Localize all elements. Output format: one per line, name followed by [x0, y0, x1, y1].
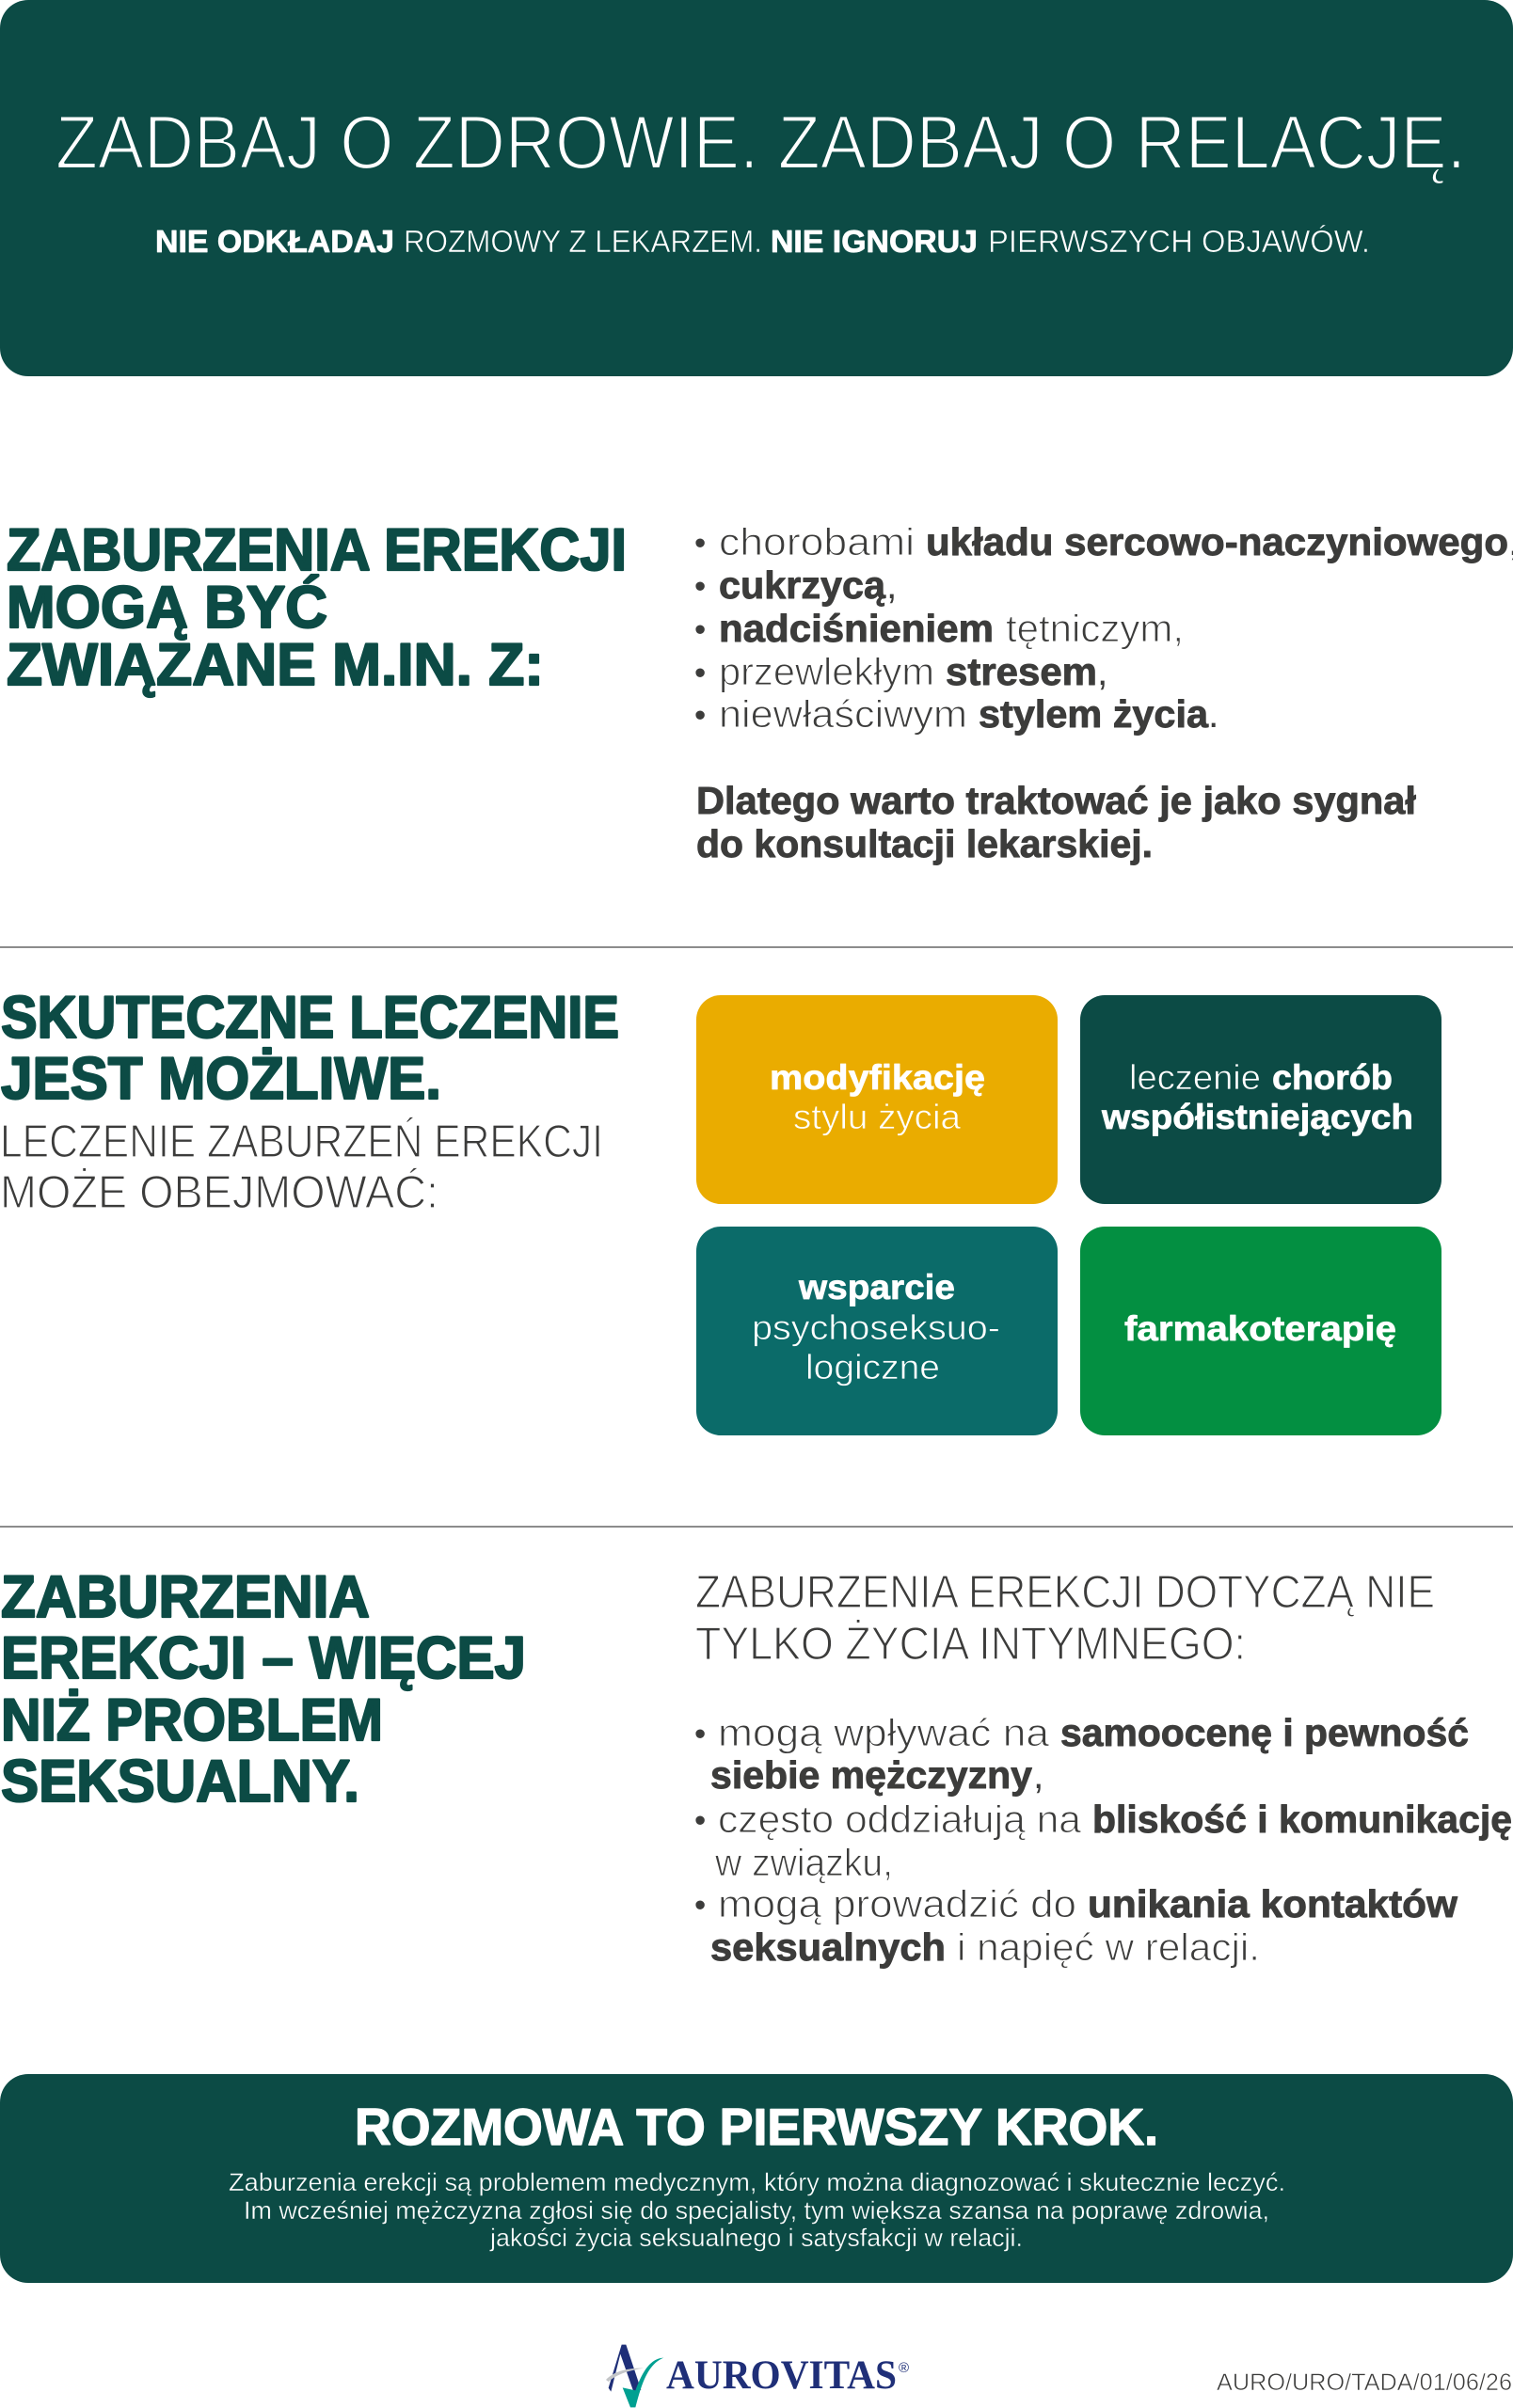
section 1 list of conditions: tętniczym,	[1006, 607, 1184, 650]
section 3 list of effects: bliskość i komunikację	[1092, 1798, 1512, 1841]
section 1 list of conditions: •	[694, 611, 706, 648]
logo wordmark: AUROVITAS	[666, 2353, 897, 2398]
logo: Aurovitas: ®	[899, 2360, 909, 2376]
section 3 list of effects: seksualnych	[710, 1925, 946, 1969]
section 3 subheading: ZABURZENIA EREKCJI DOTYCZĄ NIE	[695, 1567, 1435, 1618]
card: treatment of comorbidities: współistniejących	[1101, 1098, 1413, 1136]
section 1 heading: ZABURZENIA EREKCJI	[7, 517, 627, 583]
section 3 list of effects: unikania kontaktów	[1088, 1882, 1457, 1925]
card: treatment of comorbidities	[1080, 995, 1441, 1204]
section 1 list of conditions: przewlekłym	[719, 650, 934, 693]
subtitle: PIERWSZYCH OBJAWÓW.	[988, 224, 1370, 259]
section 2 subheading: LECZENIE ZABURZEŃ EREKCJI	[0, 1117, 603, 1167]
section 3 list of effects: mogą wpływać na	[718, 1711, 1049, 1754]
section 3 heading: ZABURZENIA	[1, 1564, 370, 1630]
card: pharmacotherapy	[1080, 1227, 1441, 1435]
section 3 subheading	[695, 1567, 1435, 1670]
subtitle	[155, 224, 1370, 259]
callout body text: jakości życia seksualnego i satysfakcji w relacji.	[489, 2224, 1023, 2252]
section 2 subheading	[0, 1117, 603, 1218]
section 1 list of conditions: stylem życia	[979, 692, 1209, 736]
section 3 heading: EREKCJI – WIĘCEJ	[1, 1625, 526, 1691]
section 1 list of conditions: cukrzycą	[719, 563, 886, 607]
section 3 subheading: TYLKO ŻYCIA INTYMNEGO:	[695, 1619, 1246, 1670]
section 2 heading: SKUTECZNE LECZENIE	[1, 985, 619, 1051]
section 2 heading	[1, 985, 619, 1112]
footer callout panel	[0, 2074, 1513, 2283]
section 3 list of effects: często oddziałują na	[718, 1798, 1081, 1841]
section 1 list of conditions	[694, 520, 1513, 736]
section 1 list of conditions: •	[694, 568, 706, 605]
card: psychosexological support: logiczne	[805, 1348, 940, 1386]
logo mark	[606, 2345, 663, 2407]
section 1 list of conditions: nadciśnieniem	[719, 607, 994, 650]
section 1 list of conditions: stresem	[946, 650, 1097, 693]
callout body text	[229, 2168, 1285, 2252]
section 1 conclusion	[696, 779, 1417, 865]
subtitle: NIE ODKŁADAJ	[155, 224, 394, 259]
card: psychosexological support	[696, 1227, 1058, 1435]
section 3 list of effects: •	[694, 1887, 706, 1924]
section 1 heading: MOGĄ BYĆ	[7, 575, 327, 641]
card: lifestyle modification: stylu życia	[793, 1098, 961, 1136]
section 3 list of effects	[694, 1711, 1512, 1969]
subtitle: NIE IGNORUJ	[771, 224, 978, 259]
section 2 heading: JEST MOŻLIWE.	[1, 1046, 441, 1112]
card: pharmacotherapy: farmakoterapię	[1124, 1309, 1396, 1348]
section 3 heading: NIŻ PROBLEM	[1, 1687, 383, 1753]
section 1 list of conditions: ,	[886, 563, 897, 607]
callout body text: Zaburzenia erekcji są problemem medycznym, który można diagnozować i skutecznie leczyć.	[229, 2168, 1285, 2196]
card: psychosexological support: psychoseksuo-	[752, 1308, 1000, 1347]
section 3 list of effects: samoocenę i pewność	[1060, 1711, 1469, 1754]
section 3 heading	[1, 1564, 526, 1814]
section 3 list of effects: ,	[1033, 1753, 1043, 1797]
section 1 list of conditions: •	[694, 697, 706, 734]
card: treatment of comorbidities: leczenie	[1129, 1058, 1261, 1097]
section 1 conclusion: do konsultacji lekarskiej.	[696, 822, 1153, 865]
section 1 list of conditions: •	[694, 655, 706, 691]
header panel	[0, 0, 1513, 376]
section 1 list of conditions: niewłaściwym	[719, 692, 967, 736]
section 1 heading: ZWIĄZANE M.IN. Z:	[7, 632, 544, 698]
section 3 list of effects: mogą prowadzić do	[718, 1882, 1076, 1925]
card: lifestyle modification	[696, 995, 1058, 1204]
subtitle: ROZMOWY Z LEKARZEM.	[404, 224, 762, 259]
card: lifestyle modification: modyfikację	[770, 1058, 985, 1097]
logo: Aurovitas	[606, 2345, 909, 2407]
section 3 list of effects: •	[694, 1716, 706, 1752]
section 2 subheading: MOŻE OBEJMOWAĆ:	[0, 1167, 438, 1218]
section 1 list of conditions: .	[1208, 692, 1218, 736]
card: psychosexological support: wsparcie	[798, 1268, 955, 1307]
section 3 list of effects: w związku,	[714, 1841, 893, 1884]
section 1 list of conditions: •	[694, 525, 706, 562]
section 1 list of conditions: ,	[1097, 650, 1107, 693]
section 1 heading	[7, 517, 627, 698]
callout heading: ROZMOWA TO PIERWSZY KROK.	[355, 2098, 1158, 2156]
card: treatment of comorbidities: chorób	[1272, 1058, 1393, 1097]
section 1 list of conditions: chorobami	[719, 520, 915, 563]
section 3 list of effects: •	[694, 1802, 706, 1839]
section 1 list of conditions: układu sercowo-naczyniowego	[926, 520, 1508, 563]
section 3 heading: SEKSUALNY.	[1, 1749, 359, 1814]
section 1 conclusion: Dlatego warto traktować je jako sygnał	[696, 779, 1417, 822]
document code: AURO/URO/TADA/01/06/26	[1217, 2369, 1512, 2396]
section 3 list of effects: siebie mężczyzny	[710, 1753, 1032, 1797]
section 3 list of effects: i napięć w relacji.	[957, 1925, 1260, 1969]
callout body text: Im wcześniej mężczyzna zgłosi się do specjalisty, tym większa szansa na poprawę zdrowia,	[244, 2196, 1269, 2225]
